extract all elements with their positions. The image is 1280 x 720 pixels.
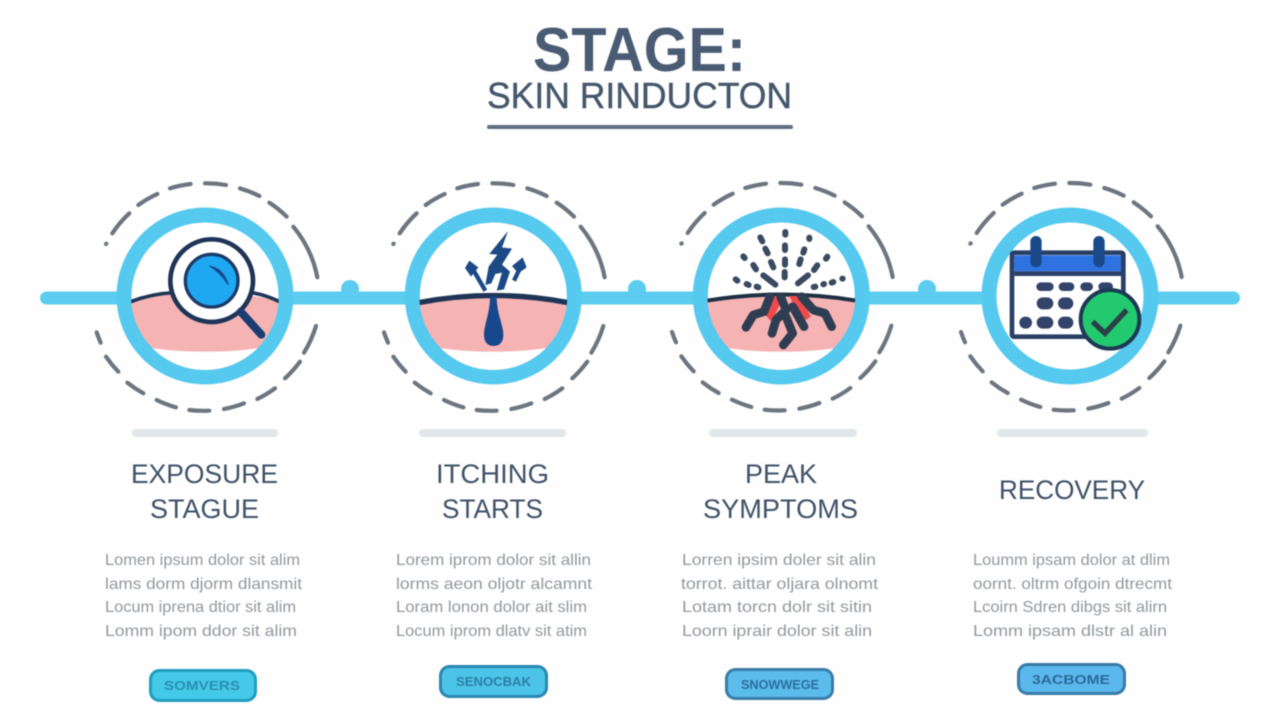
heading: stage: STAGE: — [533, 16, 746, 85]
stage 3 icon: peak symptoms — [672, 183, 893, 411]
body copy 1: Lomen ipsum dolor sit alim — [105, 552, 300, 569]
heading: itching starts: STARTS — [442, 494, 543, 524]
button 1: SOMVERS — [164, 678, 240, 693]
button 2: SENOCBAK — [456, 674, 532, 689]
body copy 3 — [681, 552, 879, 640]
stage 4 text — [973, 475, 1173, 694]
body copy 4: oornt. oltrm ofgoin dtrecmt — [973, 576, 1173, 593]
timeline connector — [40, 280, 1240, 304]
body copy 2: lorms aeon oljotr alcamnt — [396, 576, 593, 593]
body copy 2: Loram lonon dolor ait slim — [396, 599, 587, 616]
stage 3 text — [681, 459, 879, 698]
stage 2 icon: itching follicle — [384, 183, 605, 411]
body copy 4: Loumm ipsam dolor at dlim — [973, 552, 1170, 569]
body copy 3: torrot. aittar oljara olnomt — [681, 576, 879, 593]
heading: itching starts: ITCHING — [436, 459, 549, 489]
body copy 3: Loorn iprair dolor sit alin — [682, 623, 872, 640]
body copy 1: Locum iprena dtior sit alim — [105, 599, 296, 616]
heading: exposure stage — [131, 459, 278, 524]
stage 1 icon: skin under magnifier — [97, 183, 317, 411]
body copy 4: Lomm ipsam dlstr al alin — [973, 623, 1167, 640]
body copy 3: Lorren ipsim doler sit alin — [682, 552, 876, 569]
button 4 — [1018, 664, 1124, 694]
stage 1 text — [105, 459, 303, 700]
button 3: SNOWWEGE — [741, 677, 819, 692]
body copy 3: Lotam torcn dolr sit sitin — [682, 599, 872, 616]
heading: exposure stage: STAGUE — [150, 494, 259, 524]
body copy 2 — [396, 552, 593, 640]
button 3 — [726, 670, 832, 698]
heading: recovery: RECOVERY — [999, 475, 1145, 505]
body copy 1: Lomm ipom ddor sit alim — [105, 623, 297, 640]
title — [487, 16, 793, 129]
button 4: 3ACBOME — [1032, 672, 1110, 687]
body copy 2: Lorem iprom dolor sit allin — [396, 552, 591, 569]
button 2 — [440, 666, 546, 696]
body copy 1 — [105, 552, 303, 640]
title underline — [487, 125, 793, 129]
heading: itching starts — [436, 459, 549, 524]
heading: exposure stage: EXPOSURE — [131, 459, 278, 489]
body copy 4: Lcoirn Sdren dibgs sit alirn — [973, 599, 1167, 616]
body copy 4 — [973, 552, 1173, 640]
button 1 — [150, 670, 256, 700]
heading: peak symptoms — [703, 459, 858, 524]
body copy 1: lams dorm djorm dlansmit — [105, 576, 303, 593]
divider bars — [132, 429, 1148, 437]
heading: peak symptoms: PEAK — [745, 459, 817, 489]
stage 4 icon: recovery calendar — [961, 183, 1182, 411]
radiating dots — [736, 232, 843, 287]
subheading: SKIN RINDUCTON — [487, 75, 792, 116]
stage 2 text — [396, 459, 593, 696]
heading: peak symptoms: SYMPTOMS — [703, 494, 858, 524]
body copy 2: Locum iprom dlatv sit atim — [396, 623, 587, 640]
